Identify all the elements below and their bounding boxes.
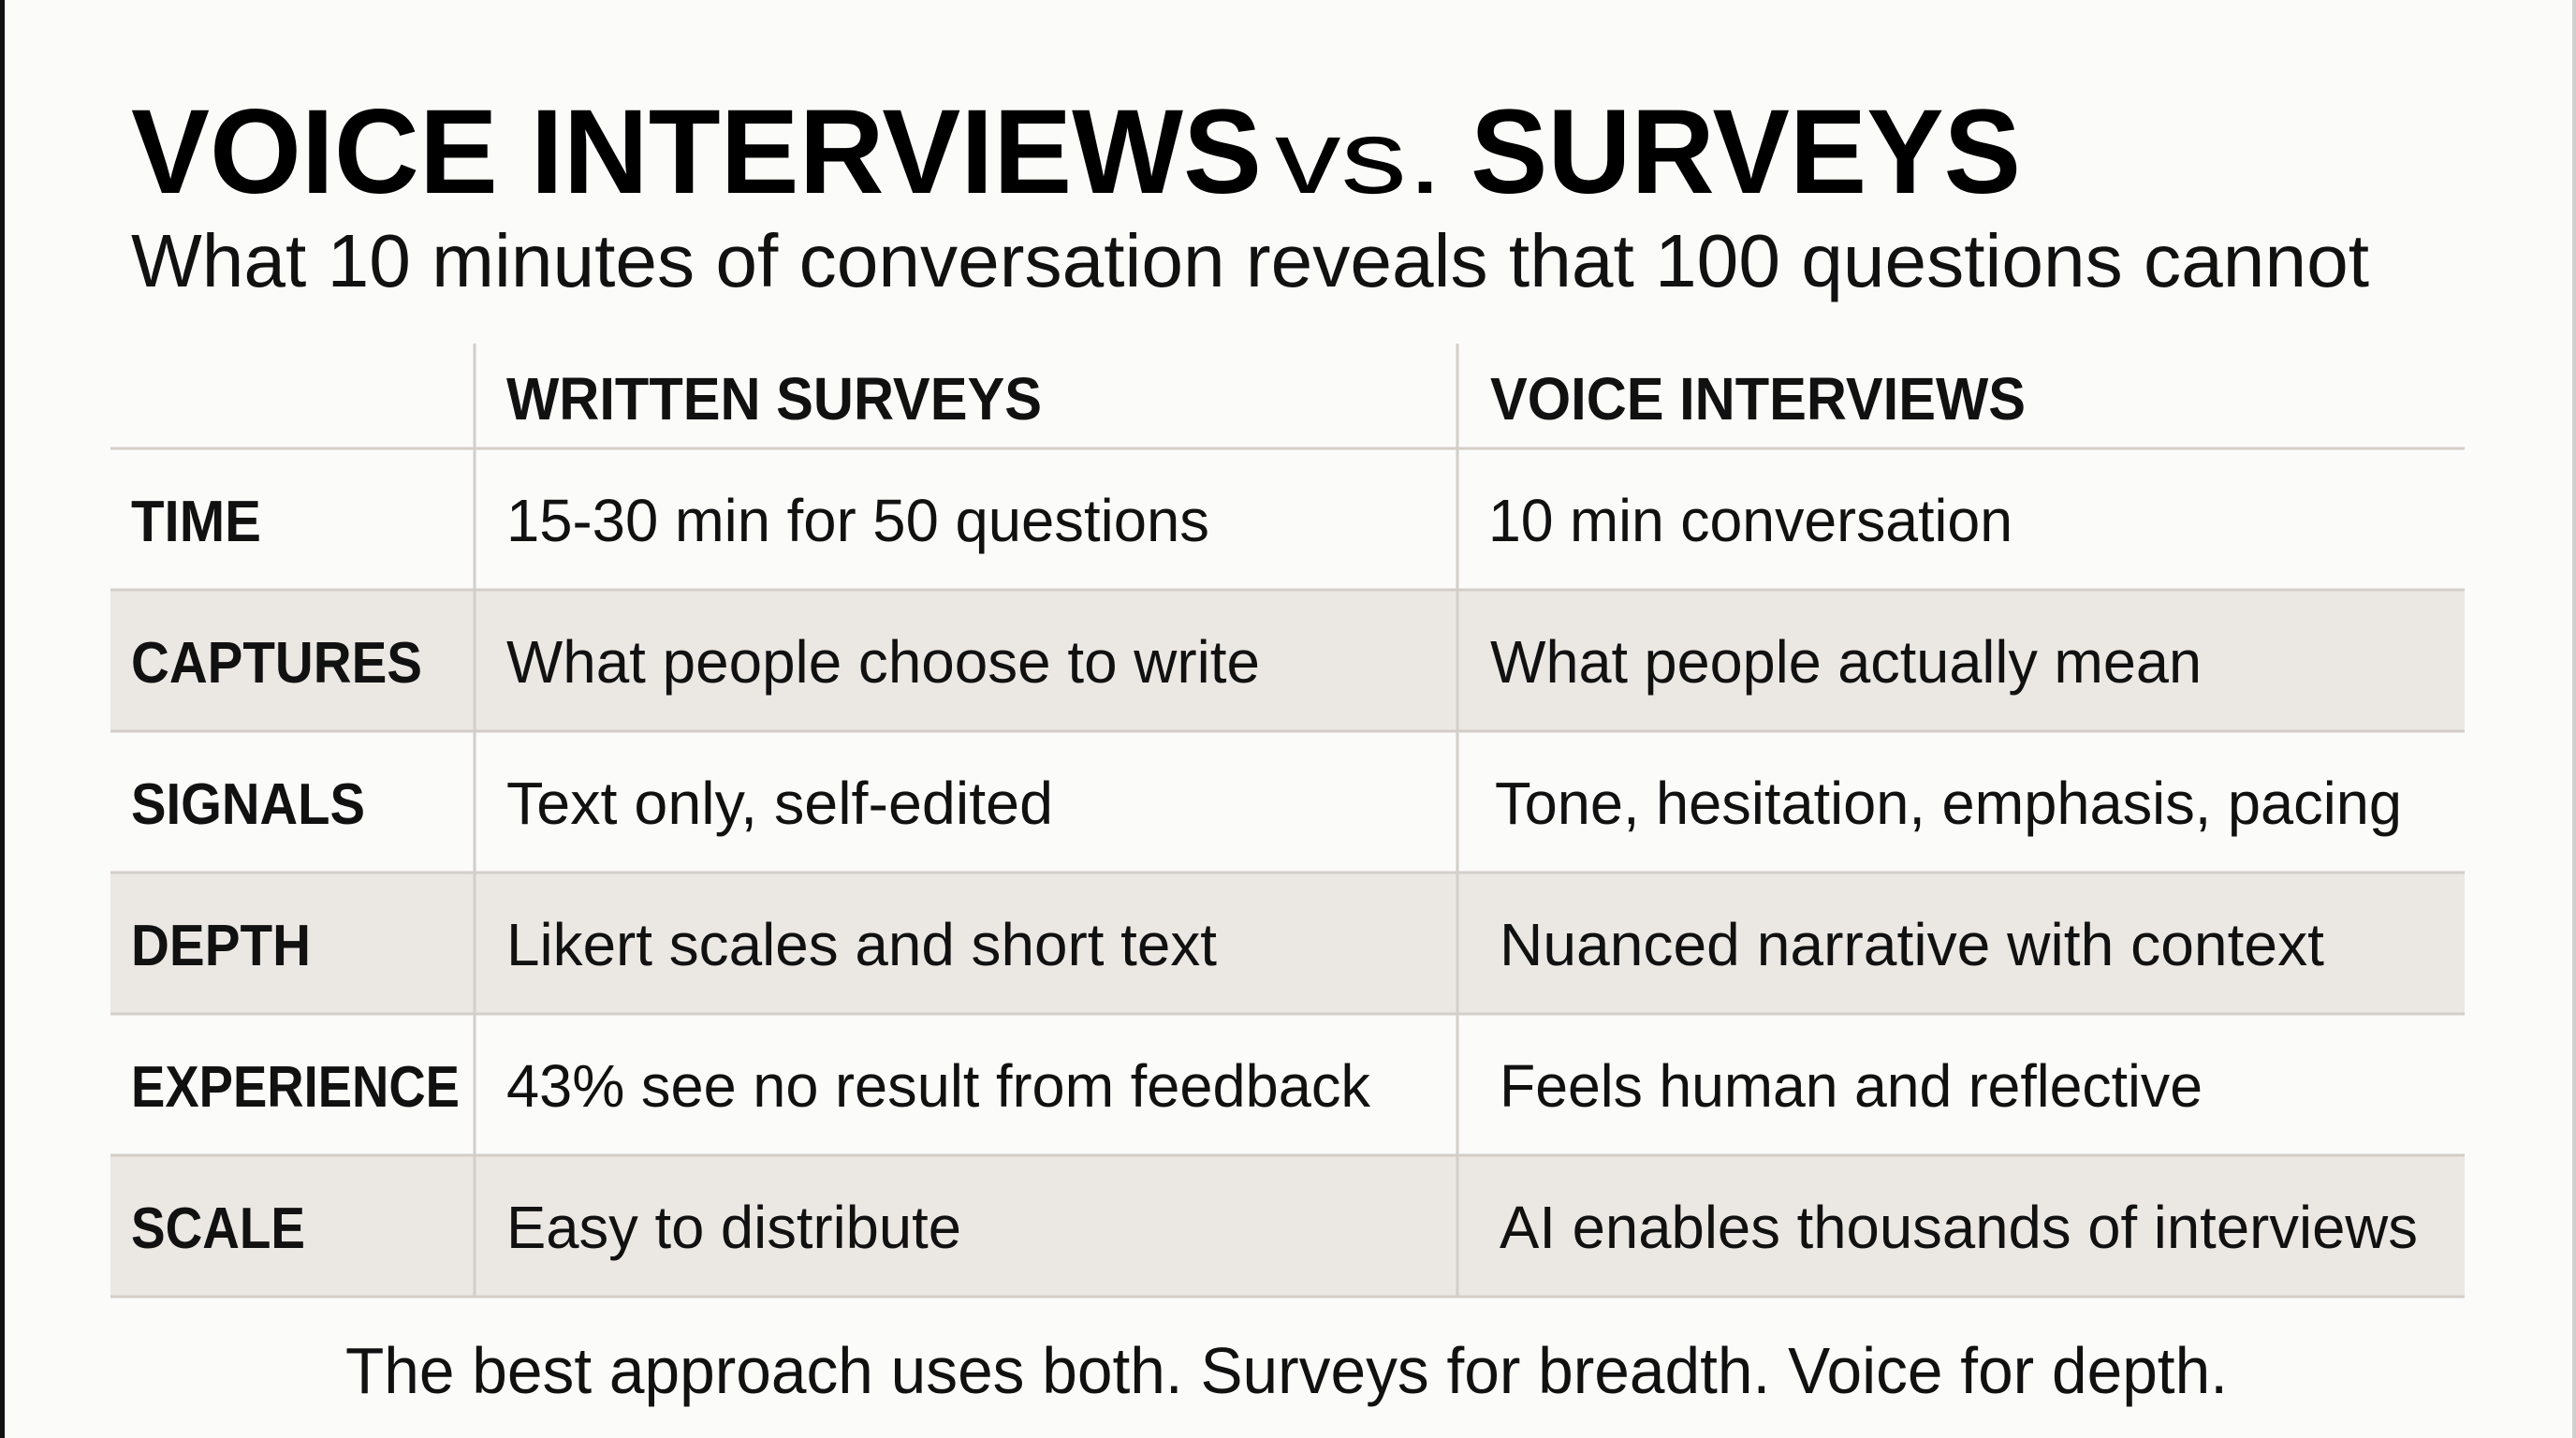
- row: scale: AI enables thousands of interviews: [1500, 1194, 2418, 1261]
- table header: WRITTEN SURVEYS: [506, 365, 1042, 433]
- row: scale: SCALE: [131, 1196, 305, 1261]
- title: [131, 85, 2021, 219]
- row: signals: Tone, hesitation, emphasis, pacing: [1495, 770, 2402, 837]
- subtitle: What 10 minutes of conversation reveals that 100 questions cannot: [131, 219, 2369, 302]
- row: scale: Easy to distribute: [506, 1194, 961, 1261]
- row: time: TIME: [131, 490, 261, 554]
- row: signals: Text only, self-edited: [506, 770, 1053, 837]
- row: time: 10 min conversation: [1488, 487, 2012, 554]
- row: signals: SIGNALS: [131, 772, 365, 837]
- table header: VOICE INTERVIEWS: [1490, 365, 2026, 433]
- row: captures: What people actually mean: [1490, 628, 2202, 696]
- row: captures: What people choose to write: [506, 628, 1260, 696]
- row: experience: 43% see no result from feedback: [506, 1052, 1371, 1120]
- row: experience: [131, 1052, 2203, 1120]
- row: signals: [131, 770, 2402, 837]
- title: SURVEYS: [1471, 85, 2021, 219]
- table header: [506, 365, 2026, 433]
- title: VOICE INTERVIEWS: [131, 85, 1262, 219]
- footer takeaway: The best approach uses both. Surveys for breadth. Voice for depth.: [345, 1334, 2228, 1407]
- row: captures: [131, 628, 2202, 696]
- row: time: [131, 487, 2012, 554]
- row: captures: CAPTURES: [131, 631, 422, 696]
- row: experience: EXPERIENCE: [131, 1055, 460, 1120]
- row: time: 15-30 min for 50 questions: [506, 487, 1209, 554]
- row: scale: [131, 1194, 2418, 1261]
- comparison table: [110, 344, 2465, 1297]
- row: experience: Feels human and reflective: [1500, 1052, 2203, 1120]
- row: depth: Nuanced narrative with context: [1500, 911, 2324, 978]
- row: depth: Likert scales and short text: [506, 911, 1217, 978]
- row: depth: DEPTH: [131, 914, 311, 978]
- title: vs.: [1275, 98, 1443, 215]
- row: depth: [131, 911, 2324, 978]
